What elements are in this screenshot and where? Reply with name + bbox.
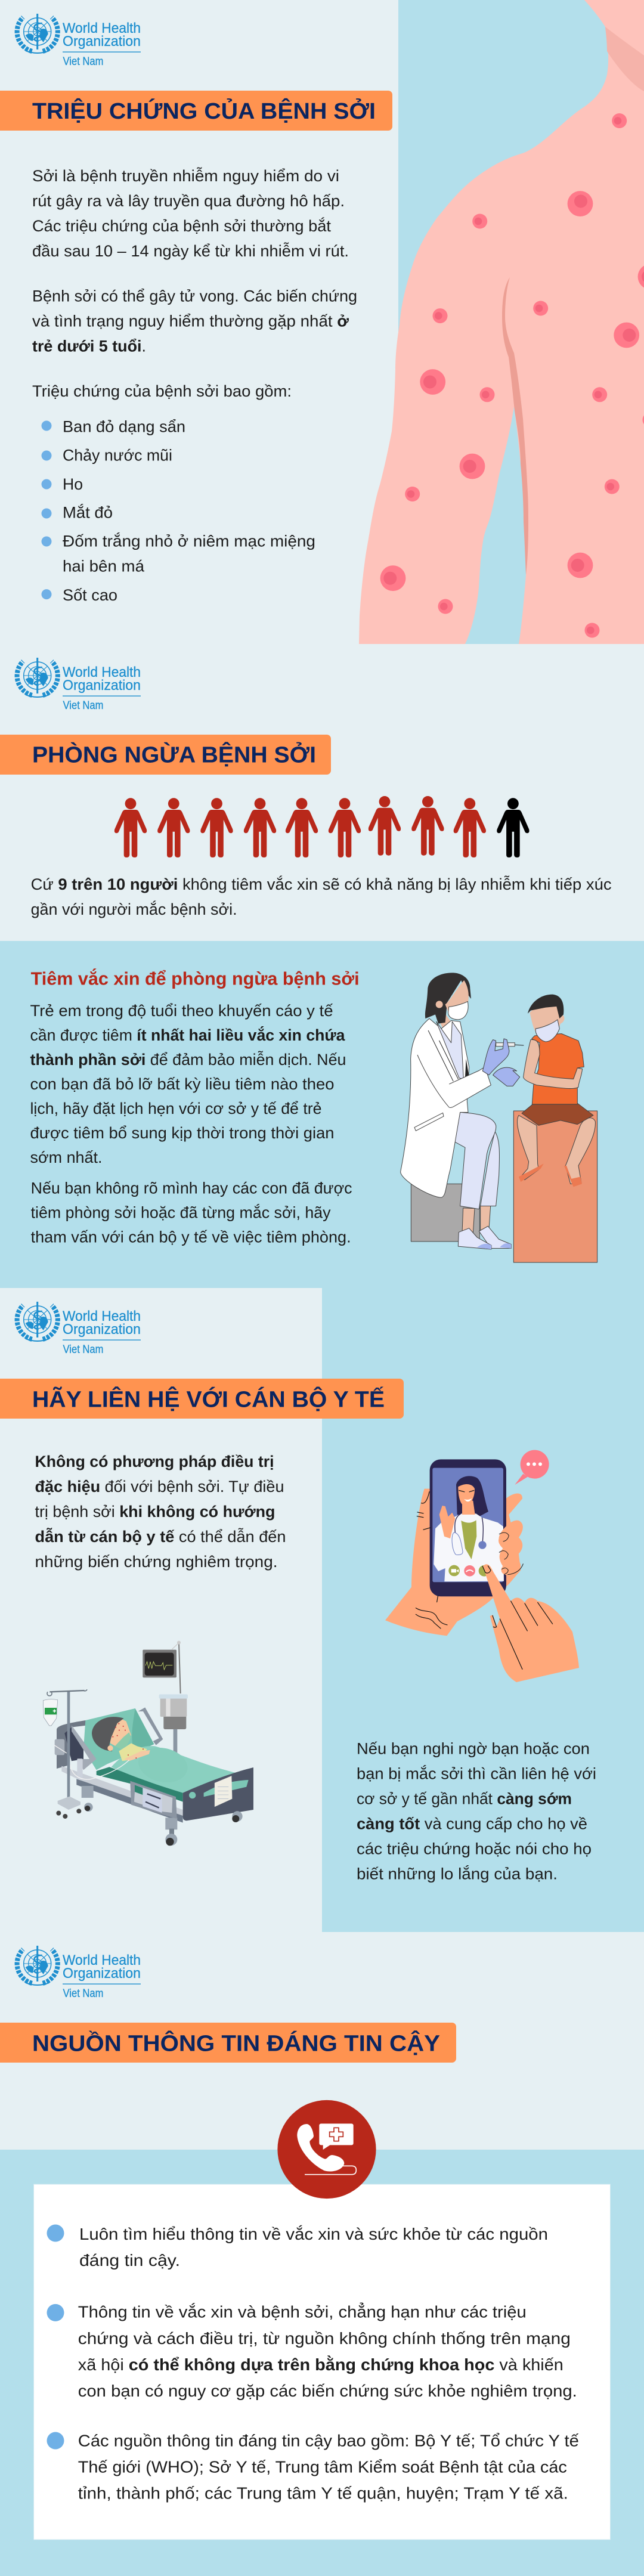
list item: trusted organisations: Thế giới (WHO); Sở Y tế, Trung tâm Kiểm soát Bệnh tật của các <box>78 2457 567 2476</box>
list: symptoms: Mắt đỏ <box>63 503 113 521</box>
text: introduction: rút gây ra và lây truyền qua đường hô hấp. <box>32 192 345 210</box>
heading bar <box>0 1379 404 1419</box>
text: vaccination advice: con bạn đã bỏ lỡ bất kỳ liều tiêm nào theo <box>30 1075 334 1093</box>
heading bar: PHÒNG NGỪA BỆNH SỞI <box>32 742 316 768</box>
WHO logo: World Health <box>63 20 141 36</box>
heading bar <box>0 2023 456 2063</box>
panel: prevention <box>0 658 644 1288</box>
blue panel: vaccination <box>0 941 644 1288</box>
list item: social media warning: chứng và cách điều trị, từ nguồn không chính thống trên mạng <box>78 2329 571 2348</box>
heading bar: HÃY LIÊN HỆ VỚI CÁN BỘ Y TẾ <box>32 1386 385 1412</box>
WHO logo: Viet Nam <box>63 1343 104 1356</box>
text: contact advice: biết những lo lắng của bạn. <box>357 1865 558 1883</box>
text: 9 in 10 statistic: gần với người mắc bệnh sởi. <box>31 900 237 918</box>
text: no specific treatment: đặc hiệu đối với bệnh sởi. Tự điều <box>35 1478 284 1496</box>
WHO logo: Viet Nam <box>63 699 104 712</box>
list: symptoms: hai bên má <box>63 558 145 575</box>
WHO logo: Organization <box>63 1965 141 1981</box>
WHO logo <box>17 1946 141 2000</box>
WHO logo <box>17 1302 141 1356</box>
text: vaccination advice: tiêm phòng sởi hoặc đã từng mắc sởi, hãy <box>31 1203 331 1221</box>
illustration: body with measles rash <box>359 0 644 644</box>
list item: trusted organisations: Các nguồn thông tin đáng tin cậy bao gồm: Bộ Y tế; Tổ chức Y tế <box>78 2431 579 2450</box>
list item: reliable sources <box>47 2224 548 2270</box>
white card <box>33 2184 611 2540</box>
text: introduction: Sởi là bệnh truyền nhiễm nguy hiểm do vi <box>32 166 339 185</box>
icon: phone with medical cross <box>277 2100 376 2199</box>
pictogram: 9 of 10 people <box>114 796 530 857</box>
text: contact advice: càng tốt và cung cấp cho họ về <box>357 1815 587 1833</box>
WHO logo: World Health <box>63 1952 141 1968</box>
text: vaccination advice: thành phần sởi để đảm bảo miễn dịch. Nếu <box>30 1050 346 1069</box>
text: complications: Bệnh sởi có thể gây tử vong. Các biến chứng <box>32 287 357 305</box>
text: vaccination advice: Trẻ em trong độ tuổi theo khuyến cáo y tế <box>30 1002 333 1020</box>
text: vaccination advice: lịch, hãy đặt lịch hẹn với cơ sở y tế để trẻ <box>30 1100 322 1117</box>
panel: trusted sources <box>0 1946 644 2576</box>
text: vaccination advice: được tiêm bổ sung kịp thời trong thời gian <box>30 1124 334 1142</box>
text: contact advice: cơ sở y tế gần nhất càng sớm <box>357 1790 572 1808</box>
illustration: doctor vaccinating child <box>401 973 597 1262</box>
text: no specific treatment: trị bệnh sởi khi không có hướng <box>35 1503 275 1521</box>
text: contact advice <box>357 1740 596 1883</box>
list item: reliable sources: Luôn tìm hiểu thông tin về vắc xin và sức khỏe từ các nguồn <box>79 2225 548 2243</box>
WHO logo: Organization <box>63 33 141 49</box>
blue side panel <box>398 0 644 644</box>
heading bar: NGUỒN THÔNG TIN ĐÁNG TIN CẬY <box>32 2030 440 2056</box>
text: vaccination advice: tham vấn với cán bộ y tế về việc tiêm phòng. <box>31 1228 351 1246</box>
illustration: video call with doctor on phone <box>385 1450 579 1682</box>
list: symptoms: Sốt cao <box>63 586 117 604</box>
WHO logo: Viet Nam <box>63 55 104 68</box>
list item: trusted organisations <box>47 2431 579 2502</box>
list: symptoms: Chảy nước mũi <box>63 446 172 464</box>
list: symptoms: Đốm trắng nhỏ ở niêm mạc miệng <box>63 532 315 550</box>
text: vaccination advice: sớm nhất. <box>30 1148 103 1166</box>
panel: contact health worker <box>0 1288 644 1932</box>
WHO logo: Organization <box>63 677 141 693</box>
text: vaccination advice: Nếu bạn không rõ mình hay các con đã được <box>31 1179 352 1197</box>
text: vaccination advice <box>30 1002 352 1246</box>
text: no specific treatment: Không có phương pháp điều trị <box>35 1453 274 1470</box>
text: introduction <box>32 166 349 260</box>
heading bar <box>0 91 392 131</box>
text: contact advice: bạn bị mắc sởi thì cần liên hệ với <box>357 1764 596 1783</box>
panel: symptoms <box>0 0 644 644</box>
text: complications <box>32 287 357 355</box>
list item: trusted organisations: tỉnh, thành phố; các Trung tâm Y tế quận, huyện; Trạm Y tế xã. <box>78 2484 568 2502</box>
text: complications: và tình trạng nguy hiểm thường gặp nhất ở <box>32 312 349 330</box>
WHO logo <box>17 14 141 68</box>
list item: social media warning: con bạn có nguy cơ gặp các biến chứng sức khỏe nghiêm trọng. <box>78 2382 577 2400</box>
text: symptom list intro: Triệu chứng của bệnh sởi bao gồm: <box>32 382 292 400</box>
WHO logo: World Health <box>63 1308 141 1324</box>
text: introduction: Các triệu chứng của bệnh sởi thường bắt <box>32 216 331 235</box>
WHO logo <box>17 658 141 712</box>
text: introduction: đầu sau 10 – 14 ngày kể từ khi nhiễm vi rút. <box>32 242 349 260</box>
list item: social media warning: xã hội có thể không dựa trên bằng chứng khoa học và khiến <box>78 2355 564 2374</box>
text: vaccination advice: cần được tiêm ít nhất hai liều vắc xin chứa <box>30 1026 345 1044</box>
WHO logo: Organization <box>63 1321 141 1337</box>
text: no specific treatment: những biến chứng nghiêm trọng. <box>35 1553 278 1571</box>
list item: social media warning <box>47 2302 577 2400</box>
WHO logo: World Health <box>63 664 141 680</box>
heading: vaccination: Tiêm vắc xin để phòng ngừa bệnh sởi <box>31 967 360 989</box>
text: contact advice: Nếu bạn nghi ngờ bạn hoặc con <box>357 1740 590 1758</box>
list: symptoms <box>42 417 315 604</box>
text: 9 in 10 statistic: Cứ 9 trên 10 người không tiêm vắc xin sẽ có khả năng bị lây nhiễm khi tiếp xúc <box>31 875 612 893</box>
list: symptoms: Ban đỏ dạng sẩn <box>63 417 185 435</box>
text: 9 in 10 statistic <box>31 875 612 918</box>
text: complications: trẻ dưới 5 tuổi. <box>32 338 146 355</box>
WHO logo: Viet Nam <box>63 1987 104 2000</box>
text: no specific treatment: dẫn từ cán bộ y tế có thể dẫn đến <box>35 1527 286 1546</box>
heading bar <box>0 735 331 775</box>
illustration: child in hospital bed <box>43 1641 253 1846</box>
list: symptoms: Ho <box>63 475 83 493</box>
list item: social media warning: Thông tin về vắc xin và bệnh sởi, chẳng hạn như các triệu <box>78 2302 527 2321</box>
text: no specific treatment <box>35 1453 286 1571</box>
heading bar: TRIỆU CHỨNG CỦA BỆNH SỞI <box>32 98 376 124</box>
blue side panel <box>322 1288 644 1932</box>
list item: reliable sources: đáng tin cậy. <box>79 2251 180 2270</box>
text: contact advice: các triệu chứng hoặc nói cho họ <box>357 1840 592 1858</box>
blue background band <box>0 2150 644 2576</box>
